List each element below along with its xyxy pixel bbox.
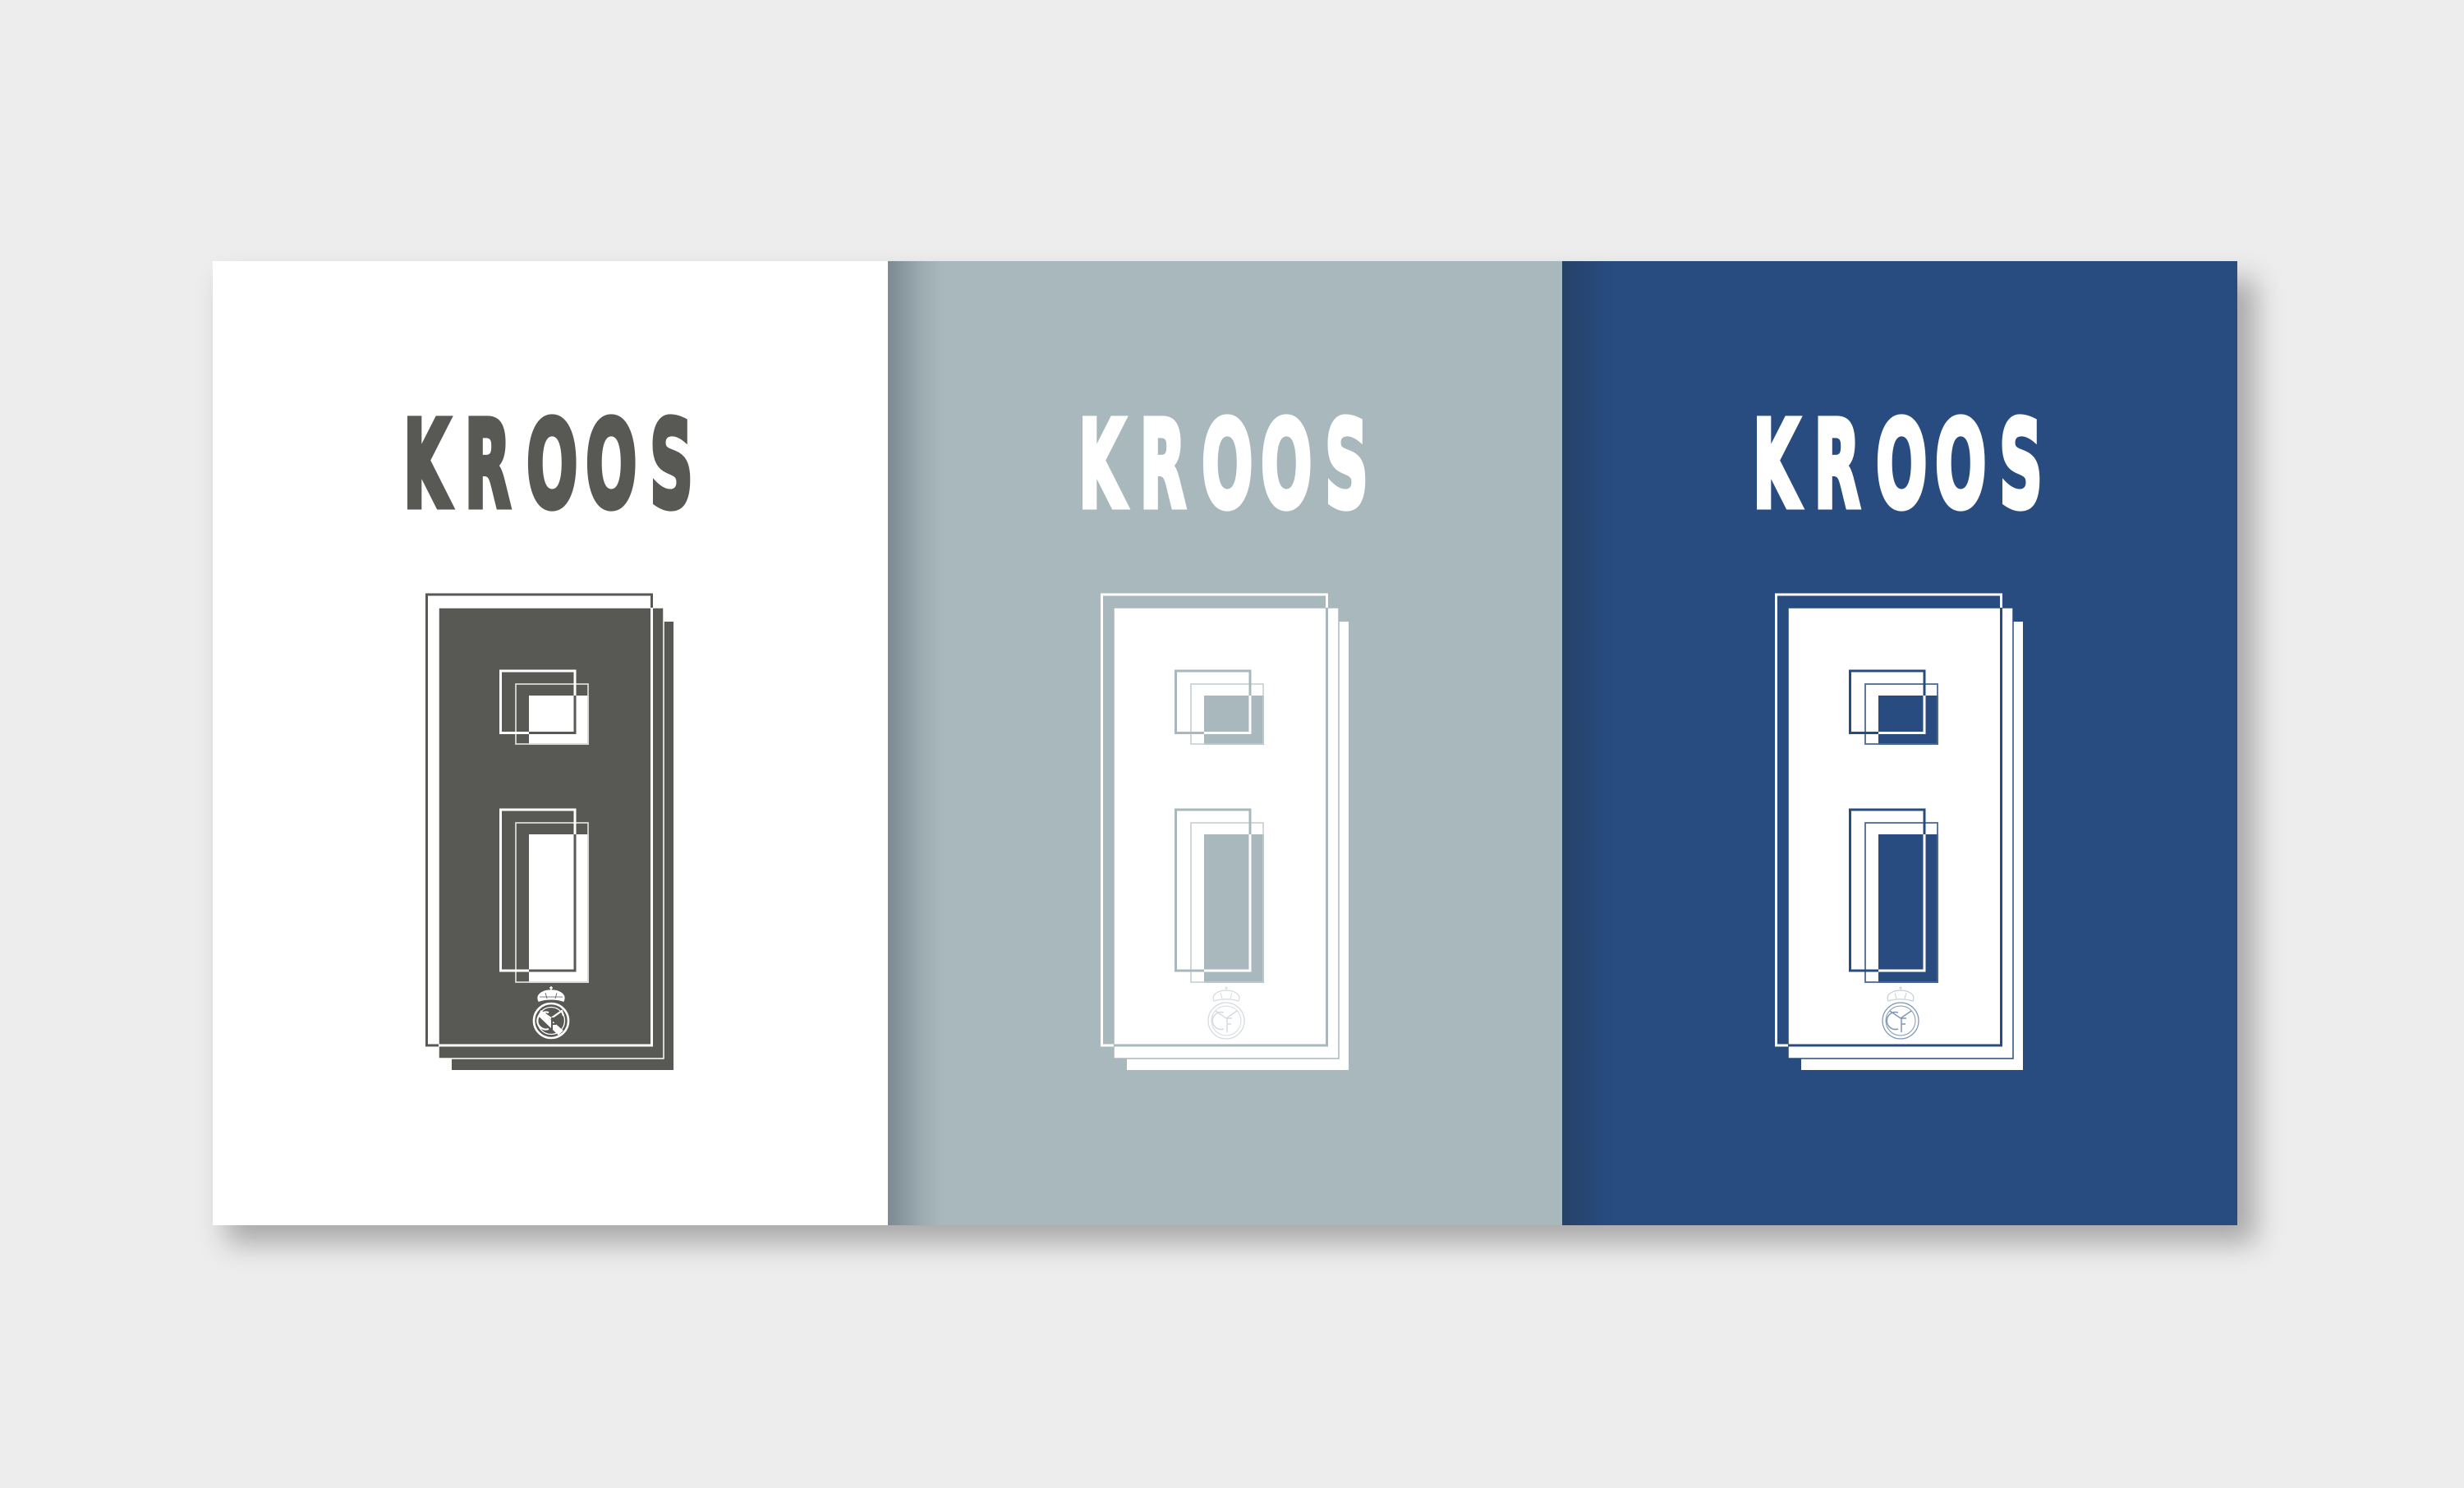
jersey number graphic: dark bbox=[427, 595, 673, 1070]
icon: club crest white bbox=[534, 986, 568, 1038]
title: KROOS dark: KROOS bbox=[403, 396, 693, 535]
icon: club crest pale bbox=[1208, 986, 1244, 1039]
jersey number graphic: white bbox=[1102, 595, 1349, 1070]
drop shadow behind panels bbox=[226, 279, 2255, 1243]
icon: club crest outline navy bbox=[1882, 986, 1919, 1039]
panel: white bbox=[213, 261, 888, 1225]
jersey number graphic: navy bbox=[1776, 595, 2023, 1070]
panel: navy bbox=[1562, 261, 2237, 1225]
title: KROOS white: KROOS bbox=[1078, 396, 1368, 535]
panel: grey blue bbox=[888, 261, 1562, 1225]
title: KROOS white on navy: KROOS bbox=[1753, 396, 2043, 535]
